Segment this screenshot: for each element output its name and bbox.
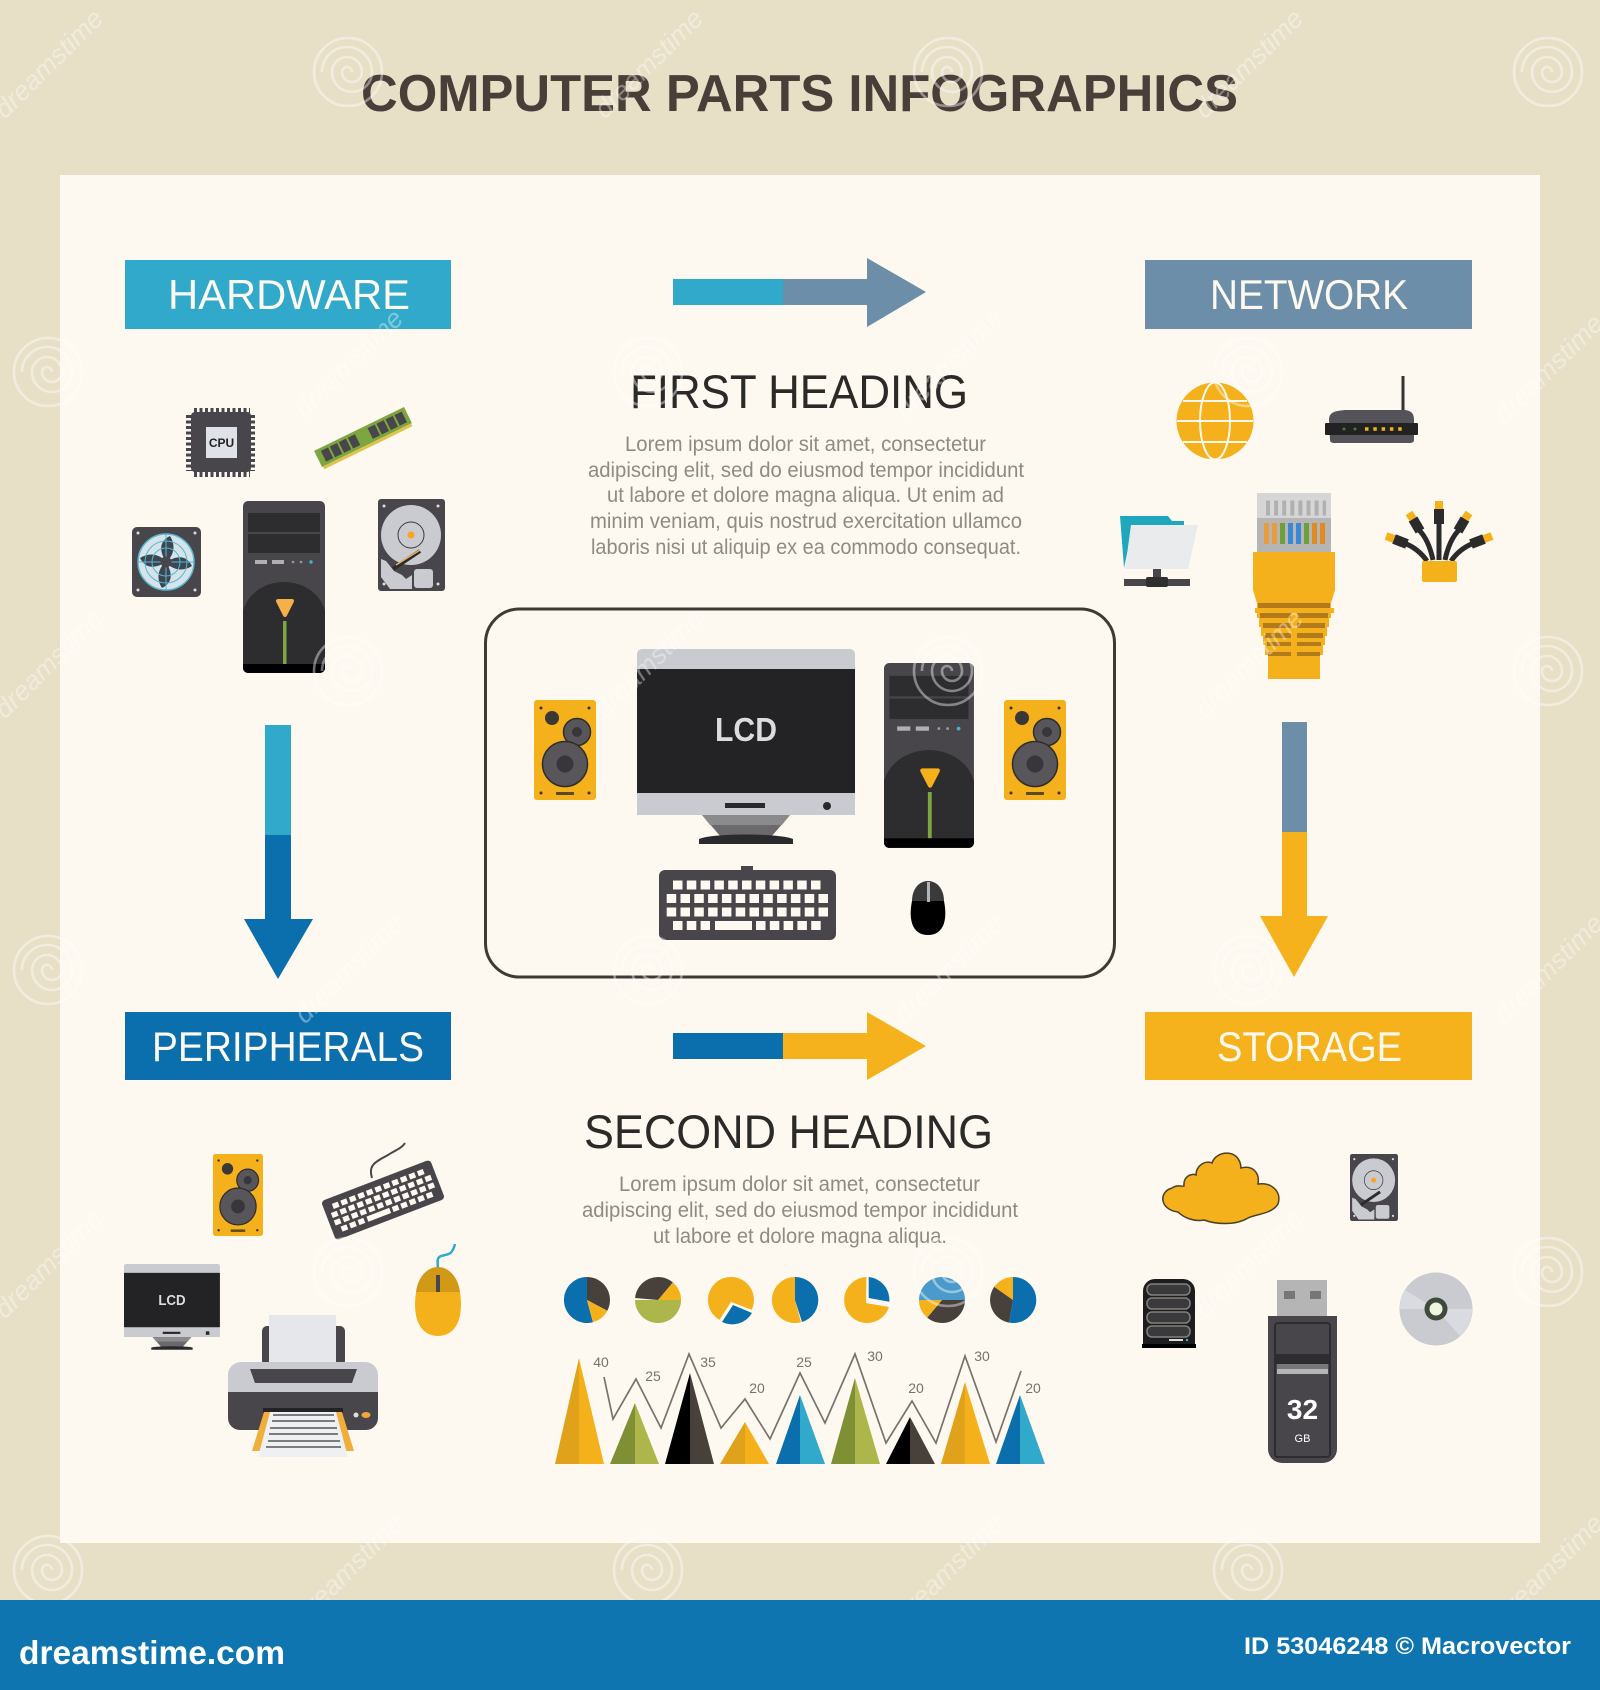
icon: printer [228, 1315, 378, 1457]
second paragraph [582, 1173, 1018, 1248]
first heading: FIRST HEADING [630, 365, 968, 418]
triangle chart with line overlay: 20 [908, 1380, 924, 1396]
icon: keyboard [659, 866, 836, 940]
first paragraph: ut labore et dolore magna aliqua. Ut enim ad [607, 484, 1004, 507]
panel: desktop computer set [486, 609, 1114, 977]
watermark: spirals and diagonal text: dreamstime [288, 303, 409, 424]
icon: small monitor: LCD [158, 1293, 186, 1309]
footer bar [0, 1600, 1600, 1690]
category label: hardware: HARDWARE [168, 271, 410, 318]
watermark: spirals and diagonal text: dreamstime [288, 908, 409, 1029]
icon: network folder [1120, 516, 1198, 587]
icon: monitor [637, 649, 855, 844]
triangle chart with line overlay: 35 [700, 1354, 716, 1370]
pie 3 [708, 1277, 754, 1324]
triangle chart with line overlay [555, 1348, 1045, 1464]
first paragraph [588, 433, 1024, 559]
second heading: SECOND HEADING [584, 1105, 993, 1158]
panel: main cream card [60, 175, 1540, 1543]
icon: ethernet plug [1253, 493, 1335, 679]
pie 2 [635, 1277, 681, 1323]
second paragraph: ut labore et dolore magna aliqua. [653, 1225, 947, 1248]
pie 6 [919, 1277, 965, 1323]
icon: tower case [243, 501, 325, 673]
icon: yellow mouse [415, 1244, 461, 1336]
icon: angled keyboard [321, 1143, 445, 1241]
triangle chart with line overlay: 20 [1025, 1380, 1041, 1396]
icon: globe [1176, 382, 1254, 460]
category label: network [1145, 260, 1472, 329]
footer logo text: dreamstime.com [19, 1634, 285, 1671]
watermark: spirals and diagonal text: dreamstime [1188, 3, 1309, 124]
triangle chart with line overlay: 40 [593, 1354, 609, 1370]
pie 5 [844, 1277, 889, 1323]
first paragraph: adipiscing elit, sed do eiusmod tempor incididunt [588, 459, 1024, 482]
pie 7 [990, 1277, 1036, 1323]
first paragraph: minim veniam, quis nostrud exercitation ullamco [590, 510, 1022, 533]
icon: ram [314, 407, 413, 470]
category label: storage [1145, 1012, 1472, 1080]
second paragraph: Lorem ipsum dolor sit amet, consectetur [619, 1173, 980, 1196]
arrow: hardware to network [673, 258, 926, 327]
watermark: spirals and diagonal text: dreamstime [1188, 1203, 1309, 1324]
footer image credit: ID 53046248 © Macrovector [1244, 1633, 1571, 1660]
category label: peripherals: PERIPHERALS [152, 1023, 424, 1070]
triangle chart with line overlay: 30 [974, 1348, 990, 1364]
triangle chart with line overlay: 20 [749, 1380, 765, 1396]
triangle chart with line overlay: 30 [867, 1348, 883, 1364]
watermark: spirals and diagonal text: dreamstime [888, 1508, 1009, 1629]
category label: peripherals [125, 1012, 451, 1080]
icon: cpu: CPU [209, 436, 234, 450]
icon: right speaker [1004, 700, 1066, 800]
icon: monitor: LCD [715, 711, 777, 748]
arrow: hardware to peripherals [244, 725, 313, 979]
icon: left speaker [534, 700, 596, 800]
watermark: spirals and diagonal text: dreamstime [288, 1508, 409, 1629]
watermark: spirals and diagonal text: dreamstime [588, 603, 709, 724]
watermark: spirals and diagonal text: dreamstime [888, 908, 1009, 1029]
title: COMPUTER PARTS INFOGRAPHICS [361, 65, 1238, 123]
first paragraph: laboris nisi ut aliquip ex ea commodo consequat. [591, 536, 1021, 559]
arrow: peripherals to storage [673, 1012, 926, 1080]
icon: small hard disk [1350, 1154, 1398, 1221]
icon: optical disc [1400, 1272, 1472, 1346]
watermark: spirals and diagonal text: dreamstime [588, 3, 709, 124]
triangle chart with line overlay: 25 [645, 1368, 661, 1384]
watermark: spirals and diagonal text: dreamstime [888, 303, 1009, 424]
first paragraph: Lorem ipsum dolor sit amet, consectetur [625, 433, 986, 456]
icon: tower case [884, 663, 974, 848]
icon: small monitor [124, 1264, 220, 1350]
pie 1 [564, 1277, 610, 1323]
icon: hard disk [378, 499, 445, 591]
watermark: spirals and diagonal text: dreamstime [1188, 603, 1309, 724]
category label: storage: STORAGE [1217, 1023, 1402, 1070]
pie charts row [564, 1277, 1036, 1324]
arrow: network to storage [1260, 722, 1328, 977]
category label: network: NETWORK [1210, 271, 1408, 318]
icon: mouse [911, 881, 945, 935]
icon: cpu [189, 411, 252, 474]
triangle chart with line overlay: 25 [796, 1354, 812, 1370]
icon: server [1142, 1279, 1196, 1348]
icon: cable bundle [1386, 501, 1492, 582]
icon: router [1325, 376, 1418, 443]
icon: usb drive [1268, 1280, 1337, 1463]
icon: cloud [1163, 1153, 1279, 1224]
second paragraph: adipiscing elit, sed do eiusmod tempor incididunt [582, 1199, 1018, 1222]
icon: usb drive: 32 [1287, 1394, 1318, 1425]
pie 4 [772, 1277, 818, 1323]
category label: hardware [125, 260, 451, 329]
icon: speaker [213, 1154, 263, 1236]
icon: cooling fan [132, 527, 201, 597]
icon: usb drive: GB [1295, 1433, 1310, 1445]
